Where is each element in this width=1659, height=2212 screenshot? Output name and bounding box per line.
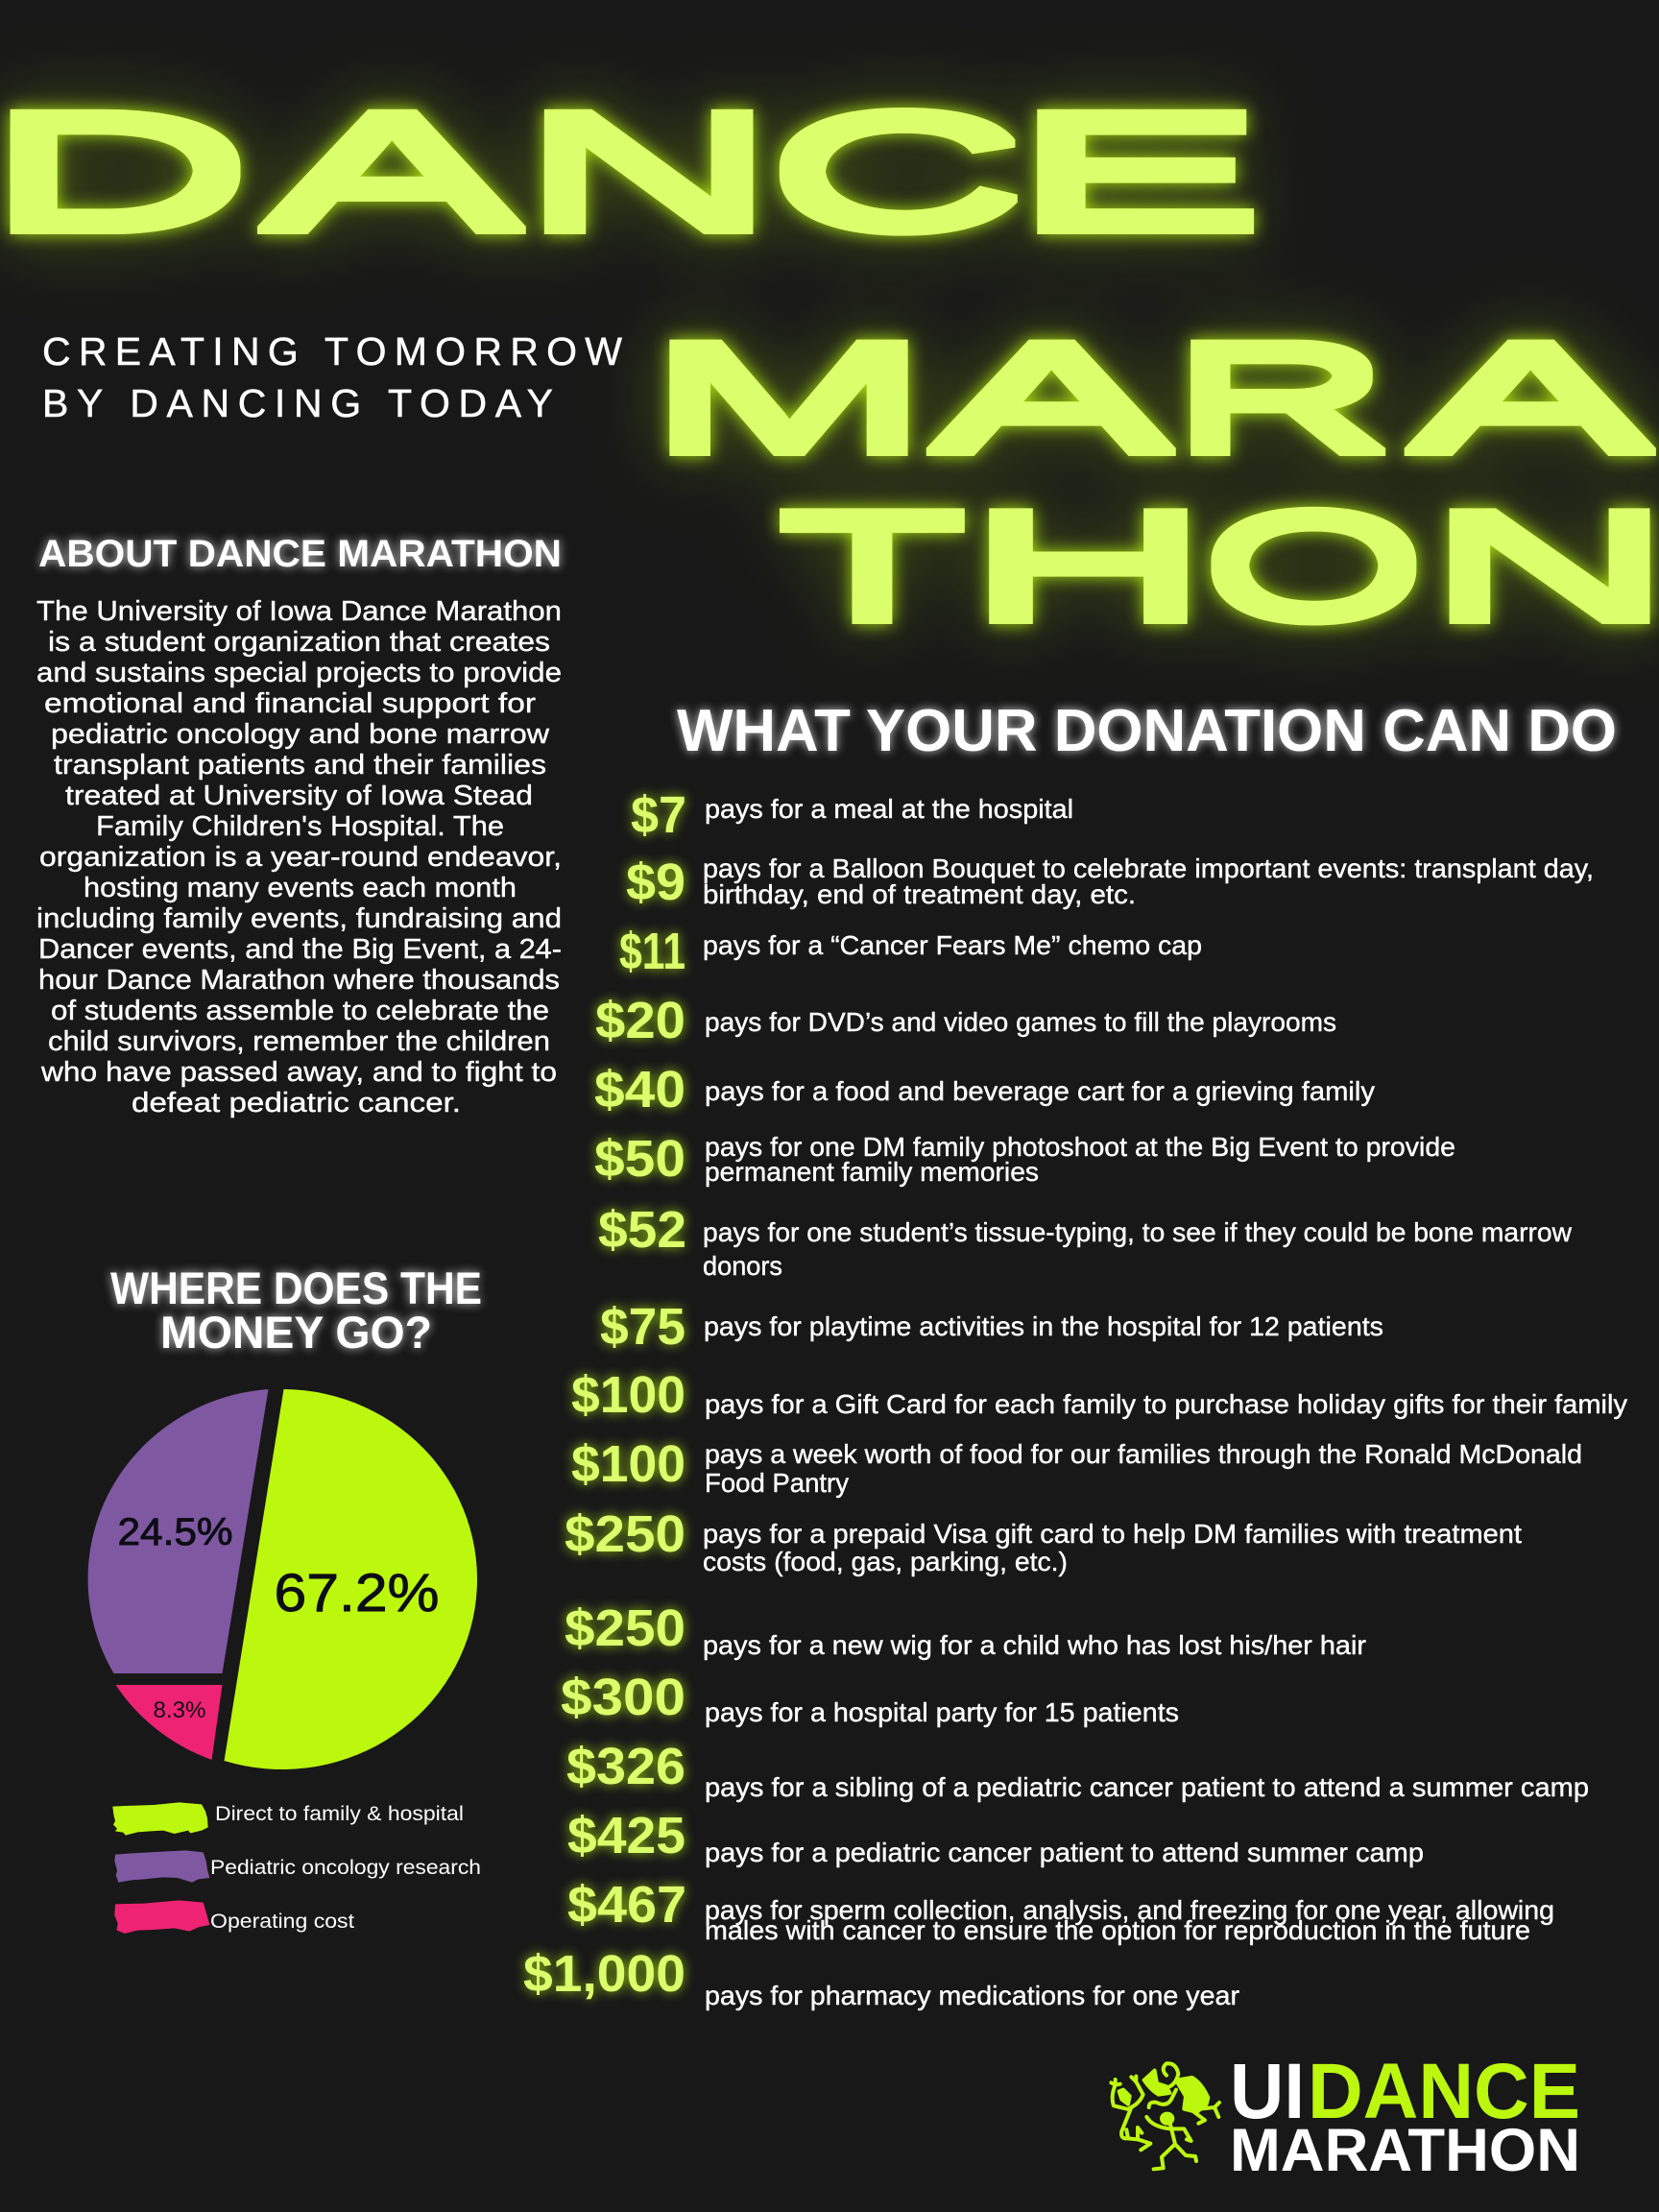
donation amounts: $11 — [619, 923, 685, 980]
about text block: including family events, fundraising and — [36, 903, 562, 934]
donation amounts: $9 — [626, 854, 685, 911]
title word: MARA: M — [648, 315, 929, 482]
title word: DANCE: C — [768, 81, 1022, 262]
donation amounts: $467 — [567, 1876, 686, 1934]
title word: THON: T — [779, 483, 966, 649]
donation amounts — [523, 786, 686, 2003]
heading: where does the money go: MONEY GO? — [160, 1307, 432, 1358]
donation amounts: $20 — [595, 992, 685, 1049]
donation descriptions: pays for a “Cancer Fears Me” chemo cap — [703, 930, 1202, 960]
legend item: pediatric oncology research: Pediatric oncology research — [210, 1857, 481, 1879]
legend — [112, 1802, 481, 1934]
donation amounts: $7 — [631, 786, 686, 844]
about text block: The University of Iowa Dance Marathon — [36, 596, 562, 627]
donation amounts: $300 — [561, 1669, 685, 1726]
value: 67.2%: 67.2% — [275, 1562, 440, 1623]
donation amounts: $52 — [598, 1201, 686, 1259]
donation descriptions: donors — [703, 1251, 782, 1281]
about text block: child survivors, remember the children — [48, 1026, 550, 1057]
donation descriptions: Food Pantry — [705, 1468, 849, 1498]
donation descriptions: pays for playtime activities in the hospital for 12 patients — [704, 1311, 1383, 1341]
donation descriptions: males with cancer to ensure the option for reproduction in the future — [705, 1915, 1530, 1945]
donation descriptions: pays for a food and beverage cart for a grieving family — [705, 1076, 1375, 1106]
about text block: emotional and financial support for — [44, 688, 536, 719]
title word: MARA: R — [1171, 315, 1389, 482]
about text block: is a student organization that creates — [48, 627, 550, 658]
donation amounts: $40 — [594, 1061, 685, 1118]
title: Dance Marathon — [0, 81, 1659, 649]
legend item: pediatric oncology research — [114, 1850, 481, 1883]
title word: THON: H — [968, 483, 1208, 649]
donation descriptions: costs (food, gas, parking, etc.) — [703, 1547, 1068, 1576]
icon: dancing figures — [1111, 2063, 1219, 2169]
about text block: hosting many events each month — [84, 873, 517, 903]
about text block — [36, 596, 562, 1118]
pie chart — [88, 1389, 477, 1769]
donation descriptions — [703, 794, 1627, 2010]
donation amounts: $1,000 — [523, 1945, 685, 2003]
title word: MARA: A — [935, 315, 1167, 482]
donation descriptions: pays for a prepaid Visa gift card to help DM families with treatment — [703, 1519, 1522, 1549]
donation amounts: $100 — [571, 1366, 685, 1424]
value: 8.3%: 8.3% — [154, 1697, 205, 1723]
donation descriptions: pays for a pediatric cancer patient to attend summer camp — [705, 1838, 1424, 1867]
title word: DANCE: A — [266, 81, 517, 262]
legend item: direct to family and hospital: Direct to family & hospital — [215, 1803, 464, 1825]
donation descriptions: birthday, end of treatment day, etc. — [703, 879, 1136, 909]
donation descriptions: pays for a meal at the hospital — [705, 794, 1073, 824]
heading: about dance marathon: ABOUT DANCE MARATHON — [38, 533, 562, 575]
slice: direct to family and hospital 67.2% — [225, 1389, 477, 1769]
donation descriptions: pays for a Gift Card for each family to purchase holiday gifts for their family — [705, 1389, 1627, 1419]
about text block: and sustains special projects to provide — [36, 658, 562, 688]
title word: DANCE: E — [1013, 81, 1263, 262]
tagline: BY DANCING TODAY — [42, 381, 553, 425]
logo: UI Dance Marathon — [1111, 2048, 1580, 2184]
about text block: Dancer events, and the Big Event, a 24- — [38, 934, 562, 965]
logo text: MARATHON: MARATHON — [1230, 2117, 1580, 2184]
donation descriptions: pays for a new wig for a child who has lost his/her hair — [703, 1630, 1366, 1660]
donation descriptions: pays for one DM family photoshoot at the Big Event to provide — [705, 1132, 1455, 1162]
tagline: CREATING TOMORROW — [42, 329, 622, 373]
legend item: operating cost: Operating cost — [210, 1911, 354, 1933]
donation descriptions: permanent family memories — [705, 1157, 1039, 1187]
donation descriptions: pays for a Balloon Bouquet to celebrate important events: transplant day, — [703, 854, 1594, 883]
about text block: pediatric oncology and bone marrow — [51, 719, 550, 750]
about text block: transplant patients and their families — [54, 750, 546, 781]
donation amounts: $75 — [600, 1298, 685, 1356]
donation amounts: $250 — [565, 1505, 685, 1563]
legend item: operating cost — [114, 1900, 354, 1934]
about text block: treated at University of Iowa Stead — [65, 781, 533, 811]
donation descriptions: pays for a sibling of a pediatric cancer patient to attend a summer camp — [705, 1772, 1589, 1802]
heading: where does the money go — [110, 1262, 482, 1358]
about text block: organization is a year-round endeavor, — [39, 842, 562, 873]
donation amounts: $50 — [594, 1130, 685, 1188]
value: 24.5%: 24.5% — [117, 1511, 232, 1553]
donation amounts: $100 — [571, 1435, 685, 1493]
donation descriptions: pays for sperm collection, analysis, and freezing for one year, allowing — [705, 1895, 1554, 1925]
donation descriptions: pays for pharmacy medications for one year — [705, 1981, 1239, 2010]
donation amounts: $425 — [567, 1807, 685, 1864]
donation descriptions: pays for one student’s tissue-typing, to see if they could be bone marrow — [703, 1217, 1573, 1247]
logo text: UI: UI — [1230, 2048, 1305, 2135]
heading: what your donation can do: WHAT YOUR DONATION CAN DO — [677, 698, 1617, 764]
about text block: hour Dance Marathon where thousands — [38, 965, 560, 996]
legend item: direct to family and hospital — [112, 1802, 464, 1836]
donation descriptions: pays a week worth of food for our families through the Ronald McDonald — [705, 1439, 1582, 1469]
about text block: defeat pediatric cancer. — [132, 1088, 461, 1118]
donation amounts: $326 — [566, 1738, 685, 1795]
about text block: who have passed away, and to fight to — [40, 1057, 557, 1088]
title word: THON: O — [1203, 483, 1425, 649]
heading: where does the money go: WHERE DOES THE — [110, 1262, 482, 1313]
donation amounts: $250 — [565, 1599, 685, 1657]
about text block: of students assemble to celebrate the — [51, 996, 549, 1026]
donation descriptions: pays for DVD’s and video games to fill the playrooms — [705, 1007, 1336, 1037]
tagline — [42, 329, 622, 425]
slice: pediatric oncology research 24.5% — [88, 1389, 269, 1673]
title word: DANCE: N — [521, 81, 776, 262]
slice: operating cost 8.3% — [115, 1685, 223, 1760]
logo text: DANCE: DANCE — [1308, 2048, 1580, 2135]
donation descriptions: pays for a hospital party for 15 patients — [705, 1697, 1179, 1727]
title word: MARA: A — [1413, 315, 1647, 482]
about text block: Family Children's Hospital. The — [96, 811, 504, 842]
title word: THON: N — [1429, 483, 1659, 649]
